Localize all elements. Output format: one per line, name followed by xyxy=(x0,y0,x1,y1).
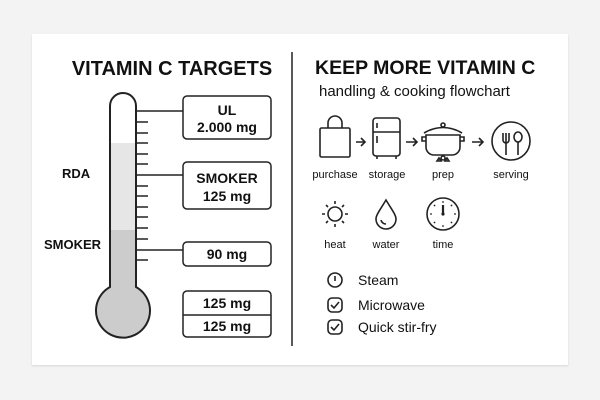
flow labels: water xyxy=(372,239,400,251)
icon: fridge xyxy=(373,118,400,159)
list icon: steam xyxy=(328,273,342,287)
icon: pot xyxy=(422,123,464,161)
method list xyxy=(358,272,437,335)
method list: Steam xyxy=(358,272,398,288)
flow labels: prep xyxy=(432,169,454,181)
label: SMOKER: SMOKER xyxy=(44,237,102,252)
list icon: stir-fry check xyxy=(328,320,342,334)
arrow 3 xyxy=(472,138,483,146)
icon: drop xyxy=(376,200,396,229)
box: UL xyxy=(183,96,271,139)
icon: bag xyxy=(320,116,350,157)
method list: Microwave xyxy=(358,297,425,313)
title: vitamin c targets: VITAMIN C TARGETS xyxy=(72,58,272,80)
flowchart icons xyxy=(320,116,530,334)
box: 125 mg double: 125 mg xyxy=(203,318,251,334)
icon: serving xyxy=(492,122,530,160)
box: smoker 125 xyxy=(183,162,271,209)
icon: clock xyxy=(427,198,459,230)
icon: sun xyxy=(322,201,348,227)
title: keep more vitamin c: KEEP MORE VITAMIN C xyxy=(315,57,535,79)
label: RDA: RDA xyxy=(62,166,91,181)
subtitle: handling & cooking flowchart xyxy=(319,83,511,100)
flow labels: storage xyxy=(369,169,405,181)
thermometer xyxy=(96,93,183,338)
flow labels: heat xyxy=(324,239,346,251)
flow labels: purchase xyxy=(312,169,358,181)
box: 125 mg double xyxy=(183,291,271,337)
card background xyxy=(32,34,568,365)
box: UL: UL xyxy=(218,102,237,118)
box: 90 mg xyxy=(183,242,271,266)
list icon: microwave check xyxy=(328,298,342,312)
arrow 2 xyxy=(406,138,417,146)
box: 125 mg double: 125 mg xyxy=(203,295,251,311)
flow labels xyxy=(312,169,529,251)
box: UL: 2.000 mg xyxy=(197,119,257,135)
box: smoker 125: SMOKER xyxy=(196,170,258,186)
box: smoker 125: 125 mg xyxy=(203,188,251,204)
box: 90 mg: 90 mg xyxy=(207,246,247,262)
arrow 1 xyxy=(356,138,365,146)
method list: Quick stir-fry xyxy=(358,319,437,335)
flow labels: time xyxy=(433,239,453,251)
flow labels: serving xyxy=(493,169,529,181)
